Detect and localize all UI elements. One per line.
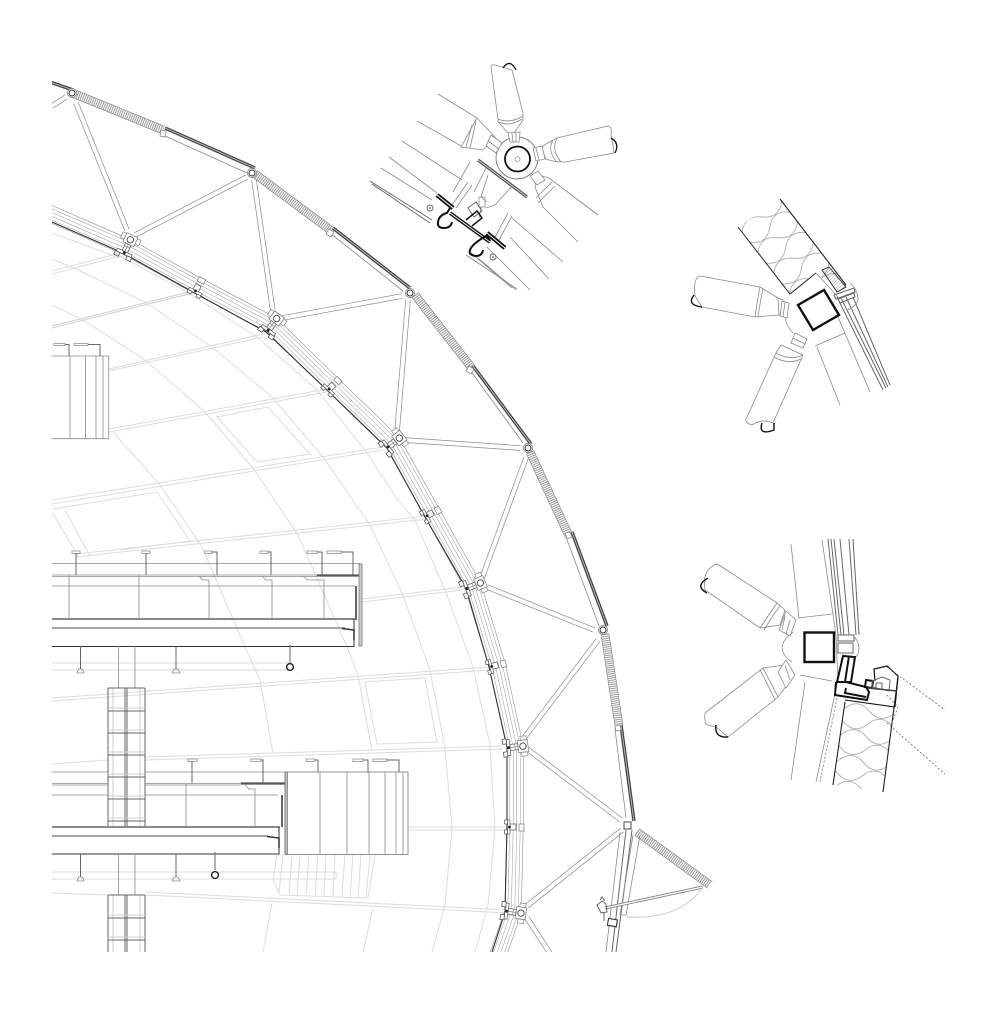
upper floor slab bbox=[52, 551, 362, 673]
outer chord nodes bbox=[67, 88, 631, 829]
structural column lattice bbox=[108, 646, 145, 952]
detail lower right: steel tube bbox=[804, 632, 834, 662]
upper slab light fixtures bbox=[72, 551, 353, 575]
detail lower right: insulation panel bbox=[833, 677, 898, 792]
inner curtain wall band bbox=[30, 205, 515, 958]
detail: top node bbox=[370, 63, 617, 290]
lower slab hanging lamps bbox=[77, 852, 218, 881]
detail lower right: lower tube bbox=[705, 660, 795, 737]
detail lower right: upper tube bbox=[701, 564, 796, 636]
detail upper right: left tube bbox=[691, 276, 789, 318]
detail lower right: black frame profile bbox=[835, 656, 898, 707]
detail: upper right node bbox=[691, 199, 890, 432]
outer insulated panels bbox=[75, 94, 710, 885]
architectural section drawing bbox=[52, 62, 946, 952]
detail upper right: insulation panel bbox=[738, 199, 846, 294]
detail upper right: lower tube bbox=[746, 317, 807, 432]
lower floor slab bbox=[52, 759, 408, 881]
detail upper right: hatched seal bbox=[822, 267, 846, 292]
detail top: right tube bbox=[533, 126, 617, 162]
detail lower right: dashed roof outline bbox=[887, 667, 945, 774]
detail lower right: wall lines bbox=[791, 540, 838, 782]
detail top: truss plate bbox=[452, 160, 527, 240]
lower slab light fixtures bbox=[188, 759, 399, 783]
detail top: glazing lines bbox=[370, 94, 598, 290]
outer glazed chord segments bbox=[50, 82, 634, 821]
detail upper right: steel tube bbox=[798, 290, 839, 330]
detail top: bolts bbox=[427, 205, 496, 260]
main dome section bbox=[30, 82, 710, 958]
inner shell joint clusters bbox=[113, 231, 529, 924]
triangular truss struts bbox=[52, 97, 622, 958]
upper slab hanging lamps bbox=[77, 645, 293, 673]
lower slab end panel bbox=[285, 772, 408, 854]
detail top: lower left strut bbox=[461, 118, 502, 153]
detail top: lower right strut bbox=[530, 171, 598, 215]
detail upper right: glazing bbox=[815, 273, 890, 405]
dome background grid bbox=[52, 233, 510, 952]
detail top: hub bbox=[496, 137, 538, 179]
parapet and roof edge bbox=[597, 830, 703, 952]
detail top: upper tube bbox=[491, 63, 523, 142]
detail top: black mullion profile bbox=[437, 195, 505, 256]
detail: lower right node bbox=[701, 539, 945, 792]
upper left end panel bbox=[52, 344, 109, 439]
detail lower right: glazing bbox=[782, 539, 859, 662]
